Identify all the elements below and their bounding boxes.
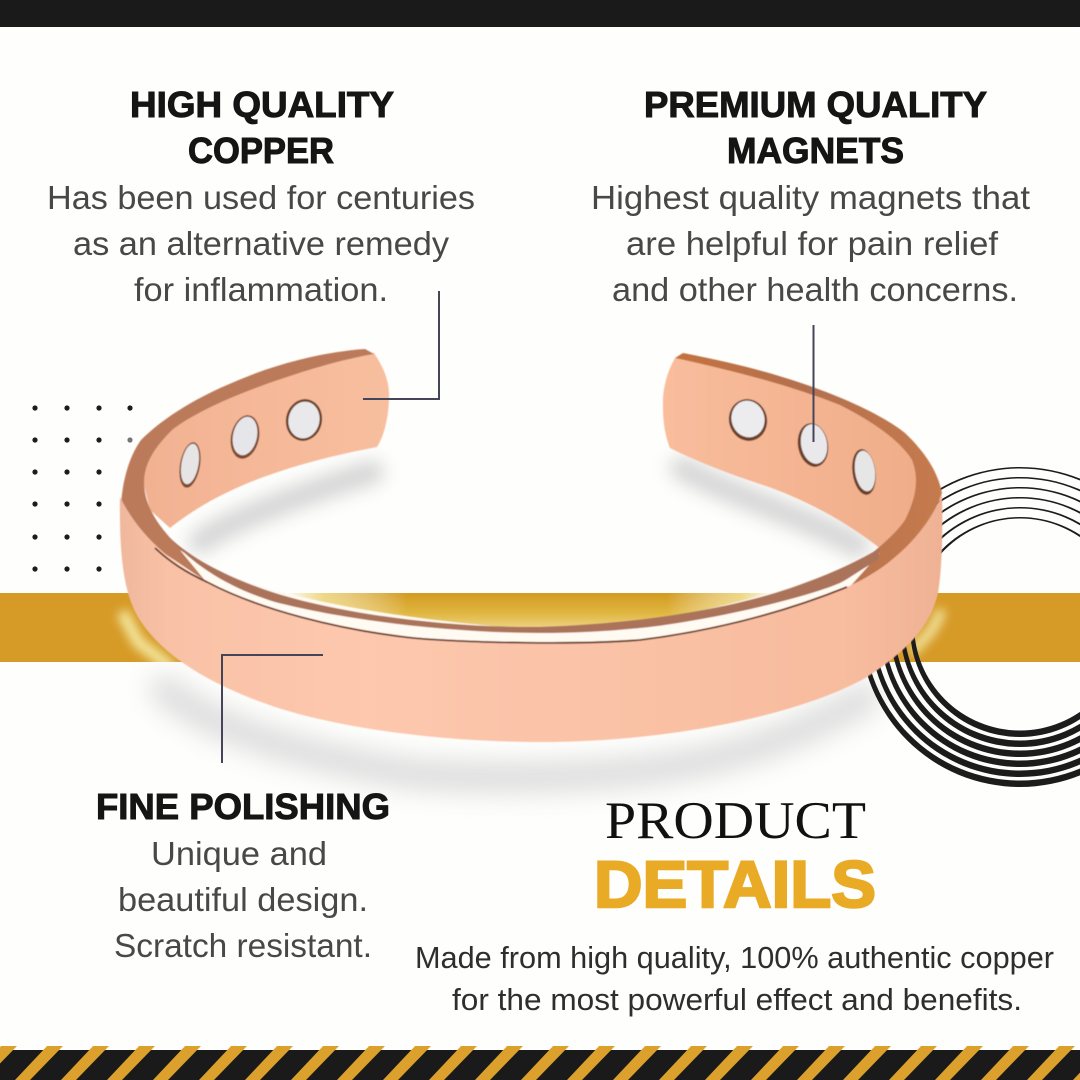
leader line: copper	[363, 291, 439, 399]
heading: product details: PRODUCT	[605, 792, 866, 850]
decorative dot grid	[32, 405, 133, 572]
dark edge line	[155, 548, 847, 643]
text block: high quality copper	[47, 84, 475, 308]
text block: high quality copper: Has been used for centuries	[47, 179, 475, 216]
text block: high quality copper: as an alternative remedy	[73, 225, 450, 262]
right magnets	[724, 395, 879, 496]
text block: product description	[415, 940, 1054, 1017]
lower rim strip	[169, 537, 880, 633]
left inner panel	[140, 353, 389, 528]
leader line: polishing	[222, 655, 323, 763]
text block: premium quality magnets	[591, 84, 1030, 308]
text block: premium quality magnets: and other health concerns.	[612, 271, 1018, 308]
text block: premium quality magnets: are helpful for pain relief	[626, 225, 999, 262]
text block: high quality copper: for inflammation.	[134, 271, 388, 308]
decorative concentric rings	[860, 467, 1080, 787]
text block: product description: for the most powerful effect and benefits.	[452, 982, 1022, 1017]
top black band	[0, 0, 1080, 27]
text block: fine polishing: FINE POLISHING	[96, 786, 390, 827]
white highlight under rim	[180, 550, 880, 646]
bracelet drop shadows	[165, 468, 865, 777]
leader line: magnets	[812, 325, 814, 442]
text block: premium quality magnets: Highest quality magnets that	[591, 179, 1030, 216]
text block: fine polishing: beautiful design.	[118, 881, 368, 918]
text block: premium quality magnets: PREMIUM QUALITY	[644, 84, 987, 125]
heading: product details: DETAILS	[594, 847, 876, 921]
text block: high quality copper: HIGH QUALITY	[130, 84, 394, 125]
heading: product details	[594, 792, 876, 921]
left magnets	[176, 396, 326, 489]
bottom hazard stripe band	[0, 1046, 1080, 1080]
right inner panel	[663, 358, 920, 550]
text block: product description: Made from high quality, 100% authentic copper	[415, 940, 1054, 975]
text block: fine polishing: Unique and	[151, 835, 327, 872]
left rim	[121, 349, 374, 582]
text block: high quality copper: COPPER	[188, 130, 334, 171]
text block: fine polishing: Scratch resistant.	[114, 927, 372, 964]
text block: fine polishing	[96, 786, 390, 964]
right rim	[675, 353, 942, 587]
front face	[120, 495, 942, 742]
copper cuff bracelet	[120, 349, 942, 742]
gold horizontal bar	[0, 593, 1080, 668]
text block: premium quality magnets: MAGNETS	[727, 130, 904, 171]
